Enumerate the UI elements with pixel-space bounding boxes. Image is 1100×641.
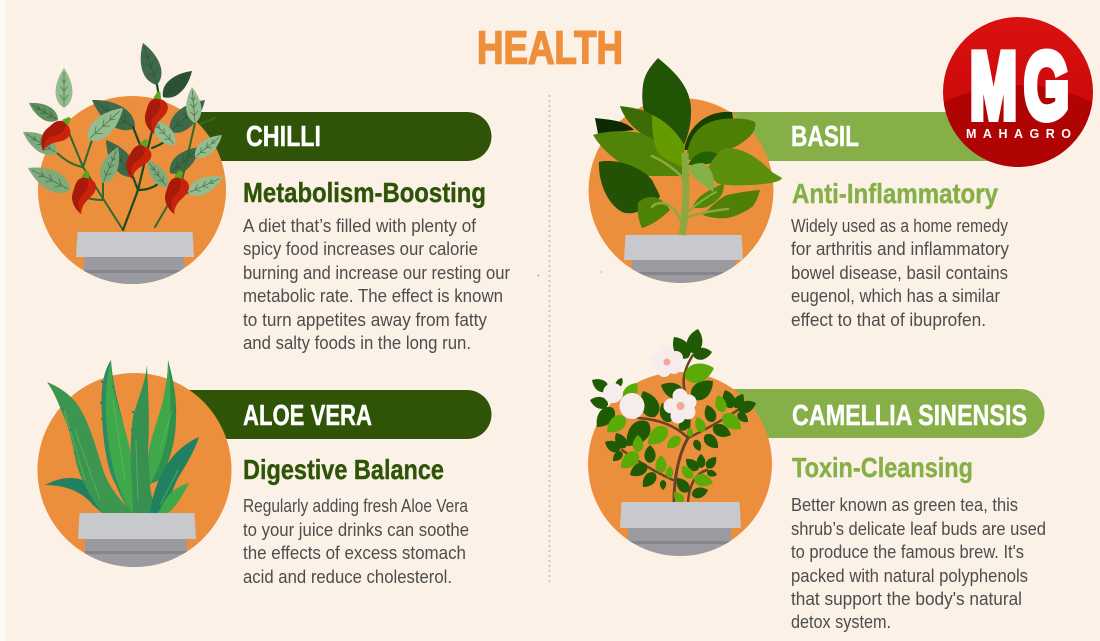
basil text: effect to that of ibuprofen.: [791, 309, 986, 330]
camellia text: packed with natural polyphenols: [791, 565, 1028, 586]
camellia flowers: [603, 345, 696, 424]
basil heading: Anti-Inflammatory: [792, 178, 998, 209]
aloe text: [243, 495, 469, 587]
logo: MG Mahagro: MAHAGRO: [966, 127, 1071, 141]
panel: camellia sinensis: [588, 327, 1046, 632]
aloe text: to your juice drinks can soothe: [243, 519, 469, 540]
aloe pot: [78, 513, 196, 570]
aloe plant: [45, 360, 199, 513]
basil text: bowel disease, basil contains: [791, 262, 1008, 283]
basil pot: [624, 235, 743, 285]
chilli pot: [76, 232, 194, 286]
chilli text: metabolic rate. The effect is known: [243, 285, 503, 306]
chilli orange circle: [38, 96, 226, 284]
camellia orange circle: [588, 372, 772, 556]
aloe name: ALOE VERA: [243, 400, 372, 432]
aloe heading: Digestive Balance: [243, 454, 444, 485]
camellia text: Better known as green tea, this: [791, 494, 1018, 515]
basil text: for arthritis and inflammatory: [791, 238, 1010, 259]
panel: aloe vera: [38, 360, 492, 587]
chilli text: [243, 215, 510, 353]
chilli text: burning and increase our resting our: [243, 262, 510, 283]
camellia text: shrub’s delicate leaf buds are used: [791, 518, 1046, 539]
camellia pot: [620, 502, 741, 557]
camellia plant: [588, 327, 758, 505]
camellia text: to produce the famous brew. It's: [791, 541, 1024, 562]
chilli text: spicy food increases our calorie: [243, 238, 478, 259]
basil text: eugenol, which has a similar: [791, 285, 1000, 306]
camellia name: CAMELLIA SINENSIS: [792, 400, 1027, 432]
aloe text: Regularly adding fresh Aloe Vera: [243, 495, 469, 516]
chilli plant: [19, 40, 227, 230]
camellia text: that support the body's natural: [791, 588, 1022, 609]
aloe orange circle: [38, 373, 232, 567]
camellia text: detox system.: [791, 611, 891, 632]
panel: basil: [588, 58, 1010, 330]
camellia text: [791, 494, 1046, 632]
logo: MG Mahagro: [940, 17, 1096, 170]
chilli text: A diet that’s filled with plenty of: [243, 215, 477, 236]
logo: MG Mahagro: M: [970, 33, 1017, 138]
basil text: [791, 215, 1010, 330]
basil banner: [681, 112, 1001, 161]
panel: chilli: [19, 40, 510, 353]
chilli name: CHILLI: [246, 121, 321, 153]
chilli text: and salty foods in the long run.: [243, 332, 471, 353]
aloe banner: [134, 390, 492, 439]
chilli text: to turn appetites away from fatty: [243, 309, 488, 330]
aloe text: the effects of excess stomach: [243, 542, 466, 563]
aloe text: acid and reduce cholesterol.: [243, 566, 452, 587]
basil plant: [593, 58, 782, 235]
basil name: BASIL: [791, 121, 859, 153]
logo: MG Mahagro: G: [1024, 33, 1069, 138]
basil text: Widely used as a home remedy: [791, 215, 1009, 236]
title: HEALTH: [477, 22, 623, 74]
basil orange circle: [588, 98, 774, 283]
chilli heading: Metabolism-Boosting: [243, 177, 486, 208]
camellia banner: [680, 389, 1044, 438]
chilli banner: [132, 112, 492, 161]
camellia heading: Toxin-Cleansing: [792, 452, 973, 483]
